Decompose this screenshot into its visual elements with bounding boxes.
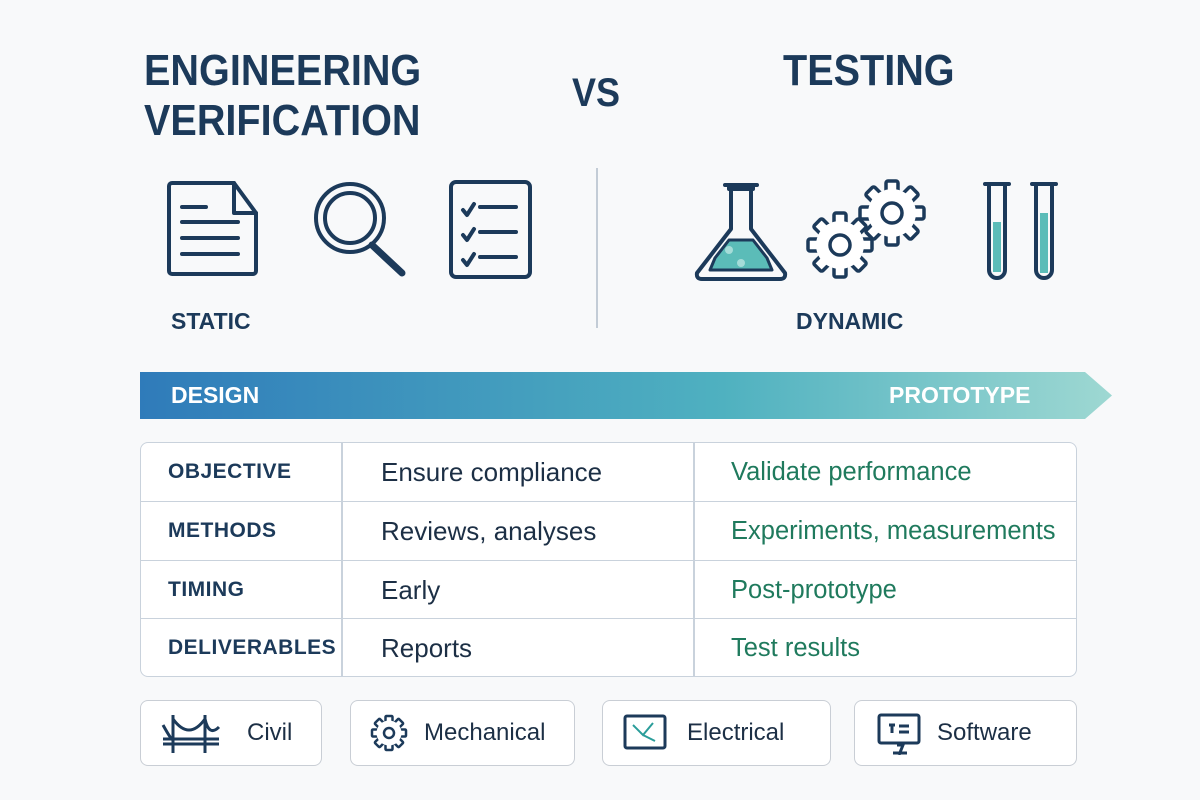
box: software [854, 700, 1077, 766]
row: objective: Ensure compliance [381, 457, 602, 487]
row: methods [141, 501, 1076, 560]
row: methods: METHODS [168, 519, 276, 542]
box: electrical [602, 700, 831, 766]
box: electrical: Electrical [687, 719, 784, 746]
icon: gears [808, 181, 924, 277]
arrow: design to prototype: DESIGN [171, 382, 259, 408]
divider [596, 168, 598, 328]
row: objective: OBJECTIVE [168, 460, 292, 483]
icon: checklist [451, 182, 530, 277]
row: objective: Validate performance [731, 458, 972, 486]
label: static: STATIC [171, 308, 251, 334]
row: timing: Post-prototype [731, 576, 897, 604]
box: mechanical: Mechanical [424, 719, 545, 746]
row: objective [168, 457, 972, 487]
title: testing: TESTING [783, 46, 955, 95]
icon: document [169, 183, 256, 274]
row: deliverables: Test results [731, 634, 860, 662]
arrow: design to prototype: PROTOTYPE [889, 382, 1030, 408]
arrow: design to prototype [140, 372, 1112, 419]
title: engineering verification: VERIFICATION [144, 96, 420, 145]
title: engineering verification [144, 46, 421, 145]
box: civil: Civil [247, 719, 292, 746]
row: timing: TIMING [168, 578, 244, 601]
row: timing: Early [381, 575, 440, 605]
row: methods: Reviews, analyses [381, 516, 596, 546]
title: engineering verification: ENGINEERING [144, 46, 421, 95]
icon: test tubes [985, 184, 1056, 278]
icon: magnifier [316, 184, 402, 273]
label: dynamic: DYNAMIC [796, 308, 903, 334]
table: comparison [140, 442, 1077, 677]
title: vs: VS [572, 71, 620, 115]
icon: flask [697, 185, 785, 279]
box: software: Software [937, 719, 1032, 746]
box: mechanical [350, 700, 575, 766]
row: deliverables: Reports [381, 633, 472, 663]
row: timing [141, 560, 1076, 619]
row: deliverables: DELIVERABLES [168, 636, 336, 659]
box: civil [140, 700, 322, 766]
row: deliverables [141, 618, 1076, 677]
row: methods: Experiments, measurements [731, 517, 1056, 545]
icons [167, 179, 1058, 281]
